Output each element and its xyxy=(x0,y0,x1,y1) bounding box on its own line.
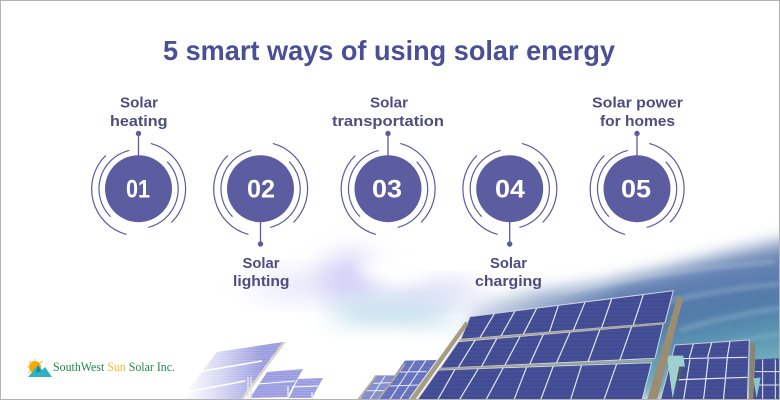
step 01: solar heating: heating xyxy=(110,113,168,130)
step 02: solar lighting: 02 xyxy=(247,176,275,204)
step 03: solar transportation: transportation xyxy=(332,113,444,130)
step 03: solar transportation: 03 xyxy=(372,176,402,204)
main panel left support xyxy=(408,322,469,400)
step 05: solar power for homes: 05 xyxy=(621,176,651,204)
step 04: solar charging: charging xyxy=(475,273,542,290)
main panel rows xyxy=(416,291,673,400)
step 01: solar heating: Solar xyxy=(120,94,158,112)
step 03: solar transportation xyxy=(332,94,444,234)
small panels left of main array xyxy=(358,360,437,399)
photo: solar panels left group xyxy=(170,340,323,400)
photo: solar panels centre array xyxy=(358,291,780,400)
step 01: solar heating: 01 xyxy=(126,176,150,204)
main panel right support xyxy=(647,295,683,400)
title: 5 smart ways of using solar energy xyxy=(163,35,615,66)
right-hand second array xyxy=(660,340,780,400)
step 04: solar charging: 04 xyxy=(495,176,525,204)
step 05: solar power for homes: for homes xyxy=(600,113,675,130)
step 02: solar lighting: Solar xyxy=(242,255,280,272)
logo: SouthWest Sun Solar Inc. xyxy=(27,359,175,377)
step 02: solar lighting: lighting xyxy=(233,273,290,290)
step 02: solar lighting xyxy=(214,143,308,290)
step 04: solar charging xyxy=(463,143,557,290)
logo text: SouthWest Sun Solar Inc. xyxy=(53,359,175,374)
step 05: solar power for homes xyxy=(590,94,684,234)
step 01: solar heating xyxy=(92,94,186,234)
step 04: solar charging: Solar xyxy=(490,255,527,272)
icon: sun and mountains xyxy=(27,359,52,377)
step 05: solar power for homes: Solar power xyxy=(592,94,683,112)
step 03: solar transportation: Solar xyxy=(370,94,408,112)
